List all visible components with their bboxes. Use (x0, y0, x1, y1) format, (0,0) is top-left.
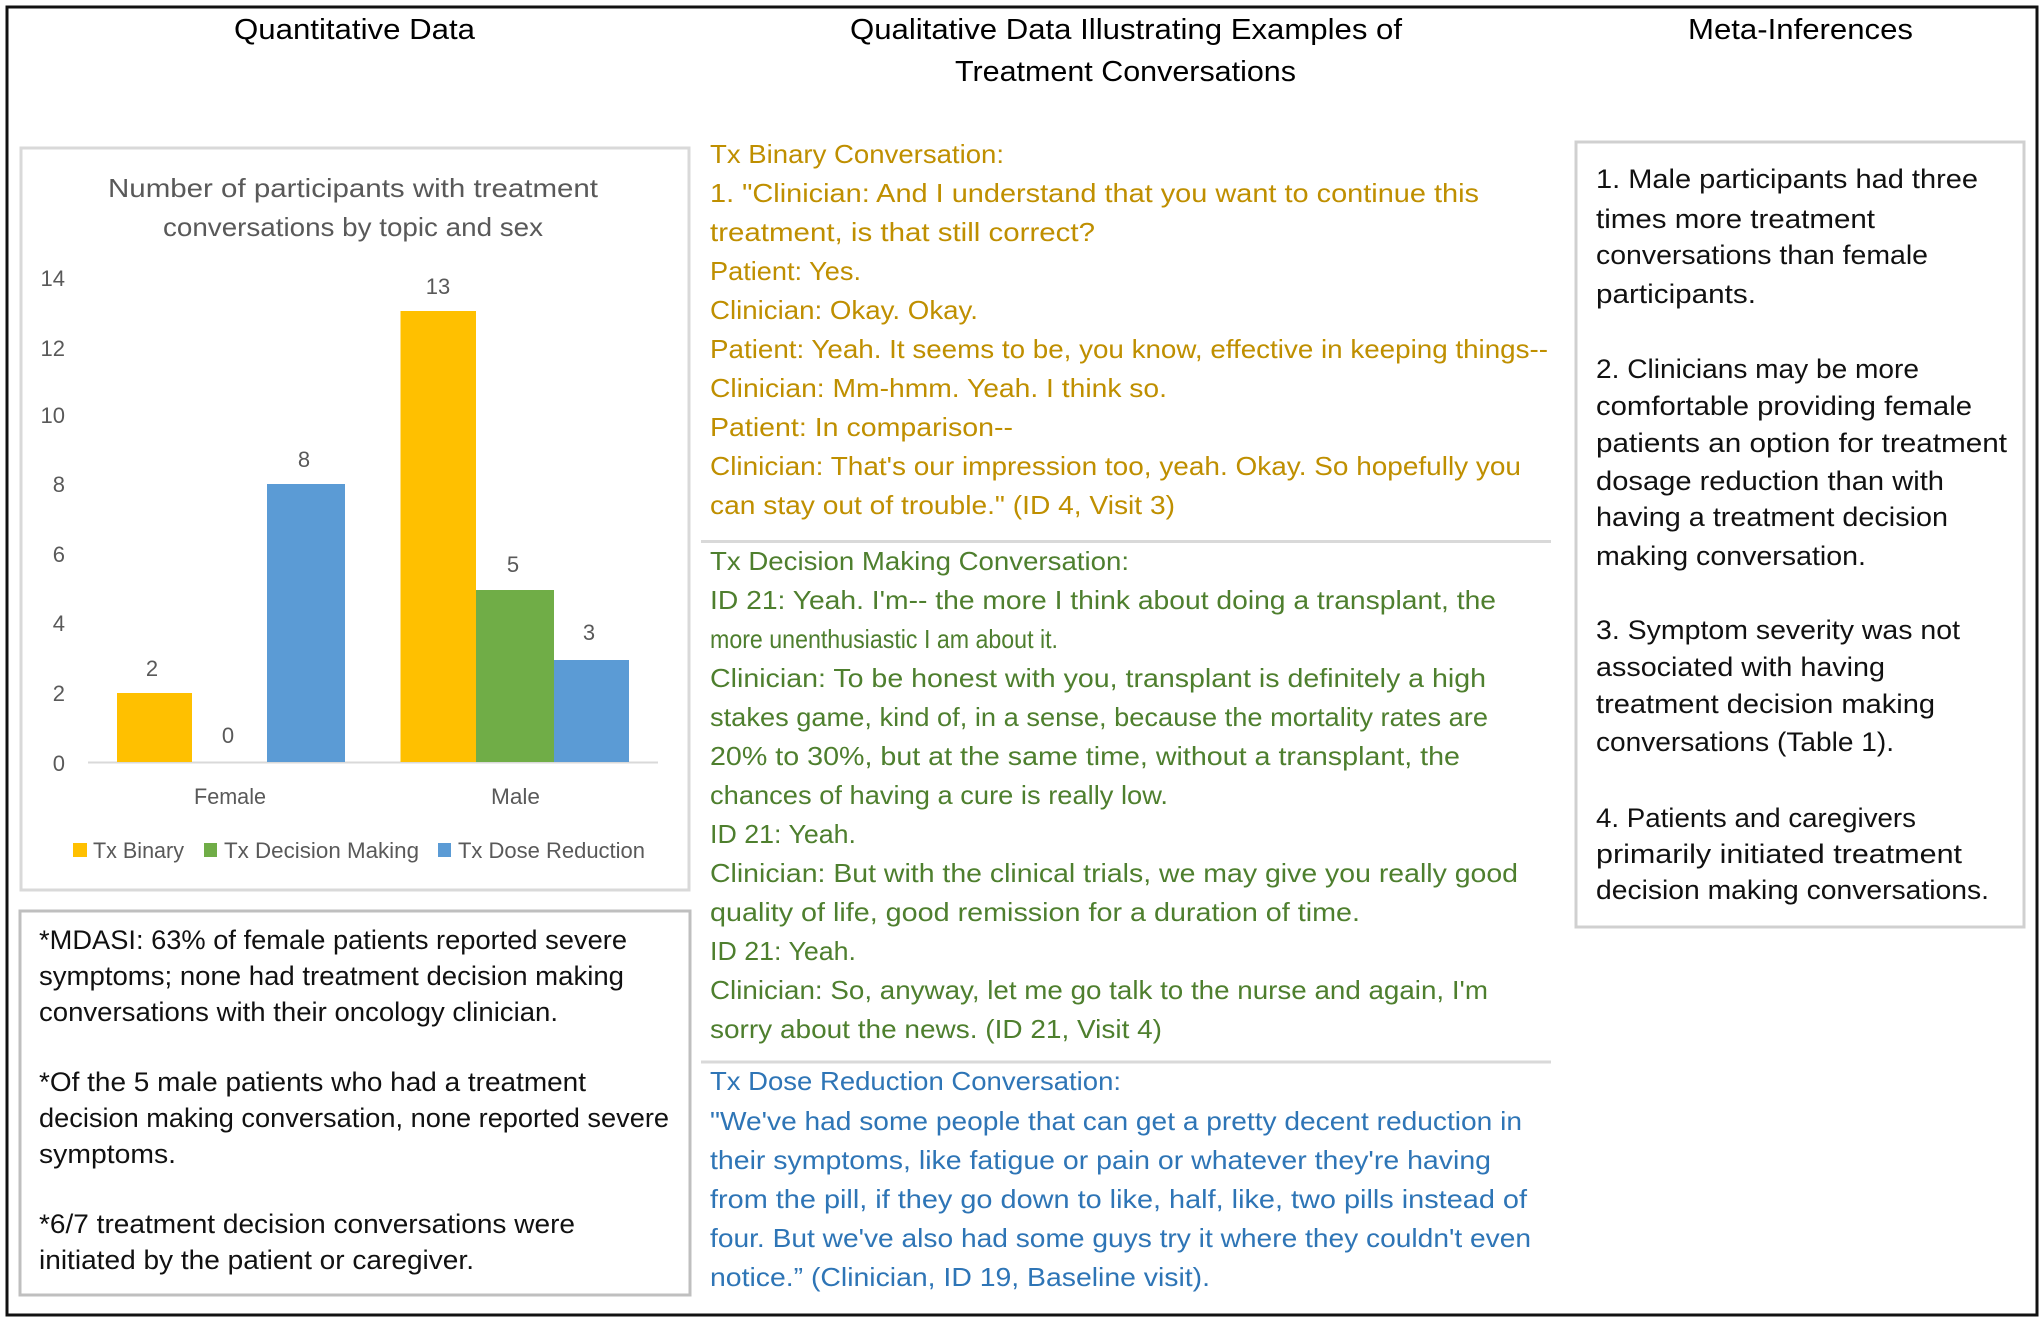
panel: quantitative notes: conversations with their oncology clinician. (39, 997, 558, 1027)
heading: Qualitative Data: Treatment Conversations (955, 56, 1296, 88)
y axis labels: 4 (53, 611, 65, 636)
y axis labels: 2 (53, 681, 65, 706)
text block: Tx Dose Reduction conversation: from the pill, if they go down to like, half, like, two pills instead of (710, 1184, 1528, 1214)
panel: meta-inferences: associated with having (1596, 652, 1885, 682)
category labels (194, 784, 540, 809)
text block: Tx Dose Reduction conversation: notice.” (Clinician, ID 19, Baseline visit). (710, 1262, 1210, 1292)
panel: meta-inferences: comfortable providing female (1596, 391, 1972, 421)
chart title: Number of participants with treatment (108, 173, 599, 203)
panel: meta-inferences: 4. Patients and caregivers (1596, 803, 1916, 833)
panel: quantitative notes: *6/7 treatment decision conversations were (39, 1209, 575, 1239)
text block: Tx Decision Making conversation: ID 21: Yeah. (710, 819, 856, 849)
text block: Tx Dose Reduction conversation: Tx Dose Reduction Conversation: (710, 1066, 1121, 1096)
bars: male (400, 311, 629, 762)
bar value labels: 8 (298, 447, 310, 472)
bar value labels: 0 (222, 723, 234, 748)
panel: meta-inferences: 1. Male participants had three (1596, 164, 1978, 194)
category labels: Female (194, 784, 266, 809)
legend (73, 838, 645, 863)
panel: quantitative notes: symptoms; none had treatment decision making (39, 961, 624, 991)
panel: meta-inferences: decision making conversations. (1596, 875, 1989, 905)
text block: Tx Decision Making conversation: Clinician: But with the clinical trials, we may give you really good (710, 858, 1518, 888)
panel: meta-inferences: participants. (1596, 279, 1756, 309)
legend: Tx Decision Making (224, 838, 419, 863)
text block: Tx Binary conversation: Patient: Yes. (710, 256, 861, 286)
text block: Tx Binary conversation: Clinician: Mm-hmm. Yeah. I think so. (710, 373, 1167, 403)
heading: Qualitative Data (850, 14, 1403, 88)
text block: Tx Decision Making conversation: 20% to 30%, but at the same time, without a transplant, the (710, 741, 1460, 771)
panel: meta-inferences: 2. Clinicians may be more (1596, 354, 1919, 384)
y axis labels: 14 (41, 266, 65, 291)
text block: Tx Decision Making conversation: more unenthusiastic I am about it. (710, 624, 1058, 654)
panel: meta-inferences: conversations than female (1596, 240, 1928, 270)
text block: Tx Binary conversation: Clinician: That's our impression too, yeah. Okay. So hopefully you (710, 451, 1521, 481)
text block: Tx Decision Making conversation: Clinician: So, anyway, let me go talk to the nurse and again, I'm (710, 975, 1488, 1005)
panel: meta-inferences: having a treatment decision (1596, 502, 1948, 532)
bar value labels: 5 (507, 552, 519, 577)
text block: Tx Dose Reduction conversation: their symptoms, like fatigue or pain or whatever they're having (710, 1145, 1491, 1175)
panel: quantitative notes: *Of the 5 male patients who had a treatment (39, 1067, 587, 1097)
panel: quantitative notes (20, 911, 690, 1295)
legend: Tx Binary (93, 838, 184, 863)
panel: meta-inferences: making conversation. (1596, 541, 1866, 571)
text block: Tx Decision Making conversation: stakes game, kind of, in a sense, because the mortality rates are (710, 702, 1488, 732)
bar value labels: 3 (583, 620, 595, 645)
text block: Tx Decision Making conversation: sorry about the news. (ID 21, Visit 4) (710, 1014, 1162, 1044)
panel: meta-inferences: patients an option for treatment (1596, 428, 2008, 458)
text block: Tx Decision Making conversation: ID 21: Yeah. (710, 936, 856, 966)
bar value labels: 13 (426, 274, 450, 299)
panel: meta-inferences: treatment decision making (1596, 689, 1935, 719)
text block: Tx Binary conversation: Clinician: Okay. Okay. (710, 295, 978, 325)
text block: Tx Binary conversation: Patient: In comparison-- (710, 412, 1013, 442)
text block: Tx Decision Making conversation (710, 546, 1518, 1044)
panel: bar chart (21, 148, 689, 890)
text block: Tx Binary conversation: treatment, is that still correct? (710, 217, 1095, 247)
text block: Tx Dose Reduction conversation (710, 1066, 1531, 1292)
y axis labels: 8 (53, 472, 65, 497)
text block: Tx Decision Making conversation: quality of life, good remission for a duration of time. (710, 897, 1360, 927)
text block: Tx Binary conversation: can stay out of trouble." (ID 4, Visit 3) (710, 490, 1175, 520)
text block: Tx Dose Reduction conversation: "We've had some people that can get a pretty decent reduction in (710, 1106, 1522, 1136)
panel: meta-inferences: 3. Symptom severity was not (1596, 615, 1961, 645)
text block: Tx Binary conversation: 1. "Clinician: And I understand that you want to continue this (710, 178, 1479, 208)
text block: Tx Decision Making conversation: Clinician: To be honest with you, transplant is definitely a high (710, 663, 1486, 693)
text block: Tx Binary conversation (710, 139, 1548, 520)
chart title: conversations by topic and sex (163, 212, 543, 242)
chart title (108, 173, 599, 242)
panel: meta-inferences: conversations (Table 1). (1596, 727, 1894, 757)
y axis labels: 0 (53, 751, 65, 776)
text block: Tx Binary conversation: Patient: Yeah. It seems to be, you know, effective in keeping things-- (710, 334, 1548, 364)
heading: Qualitative Data: Qualitative Data Illustrating Examples of (850, 14, 1403, 46)
y axis labels: 10 (41, 403, 65, 428)
text block: Tx Decision Making conversation: Tx Decision Making Conversation: (710, 546, 1129, 576)
panel: quantitative notes: *MDASI: 63% of female patients reported severe (39, 925, 627, 955)
panel: quantitative notes: symptoms. (39, 1139, 176, 1169)
panel: meta-inferences: times more treatment (1596, 204, 1876, 234)
x axis line (88, 762, 658, 764)
text block: Tx Binary conversation: Tx Binary Conversation: (710, 139, 1004, 169)
y axis labels (41, 266, 65, 776)
heading: Quantitative Data: Quantitative Data (234, 14, 476, 46)
panel: quantitative notes: initiated by the patient or caregiver. (39, 1245, 474, 1275)
panel: meta-inferences: primarily initiated treatment (1596, 839, 1963, 869)
bar value labels (146, 274, 595, 748)
heading: Meta-Inferences: Meta-Inferences (1688, 14, 1913, 46)
text block: Tx Decision Making conversation: ID 21: Yeah. I'm-- the more I think about doing a transplant, the (710, 585, 1496, 615)
panel: meta-inferences: dosage reduction than with (1596, 466, 1944, 496)
text block: Tx Decision Making conversation: chances of having a cure is really low. (710, 780, 1168, 810)
legend: Tx Dose Reduction (458, 838, 645, 863)
category labels: Male (491, 784, 540, 809)
panel: quantitative notes: decision making conversation, none reported severe (39, 1103, 669, 1133)
text block: Tx Dose Reduction conversation: four. But we've also had some guys try it where they couldn't even (710, 1223, 1531, 1253)
y axis labels: 12 (41, 336, 65, 361)
y axis labels: 6 (53, 542, 65, 567)
bars: female (117, 484, 345, 762)
bar value labels: 2 (146, 656, 158, 681)
panel: meta-inferences (1576, 142, 2024, 927)
